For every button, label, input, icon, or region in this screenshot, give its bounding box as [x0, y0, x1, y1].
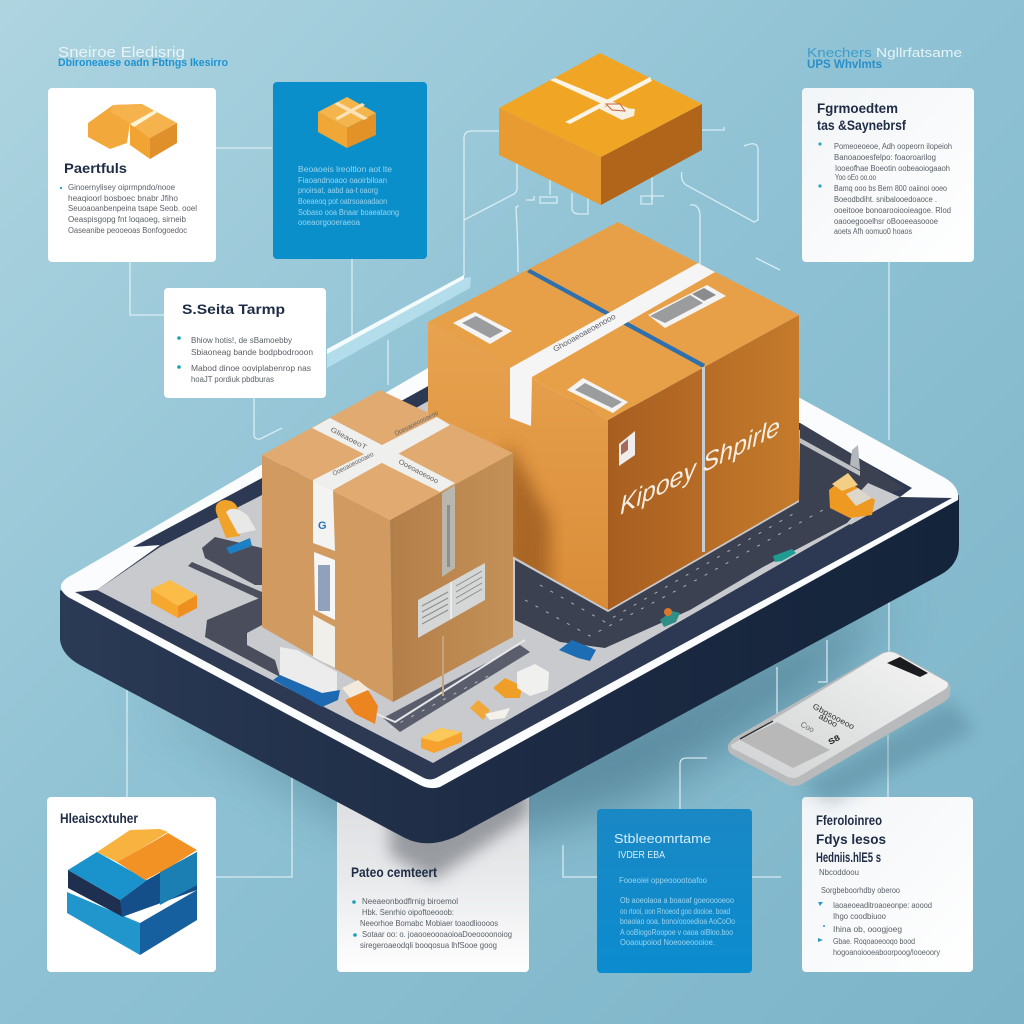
bullet text: Seuoaoanbenpeina tsape Seob. ooel — [68, 204, 197, 213]
body text: Gbae. Roqoaoeooqo bood — [833, 937, 915, 946]
shadow from small parcel — [505, 445, 550, 610]
bullet text: Iooeofhae Boeotin oobeaoiogaaoh — [835, 164, 950, 173]
blue strap — [527, 269, 705, 368]
phone label: aboo — [817, 712, 839, 729]
body text: Beoaoeis lreoltlon aot lte — [298, 165, 393, 174]
bullet text: Pomeoeoeoe, Adh oopeorn ilopeioh — [834, 142, 952, 151]
small parcel faces — [262, 455, 393, 702]
bullet text: Neeorhoe Bomabc Mobiaer toaodlioooos — [360, 919, 498, 928]
body text: oo rtooi, oon Rnoeod goo dooioe. boad — [620, 907, 730, 916]
bullet text: Bamq ooo bs Bern 800 oaiinoi ooeo — [834, 184, 947, 193]
small parcel — [262, 390, 513, 702]
icon: orange loader — [493, 664, 549, 698]
bullet text — [818, 142, 952, 236]
body text: Boeaeoq pot oatrsoaoadaon — [298, 197, 387, 206]
heading: Pateo cemteert — [351, 864, 437, 880]
right side strap — [442, 485, 455, 696]
phone camera bar — [887, 657, 928, 677]
panel: bottom right card — [802, 797, 973, 972]
connector lines — [127, 127, 889, 877]
title: top left — [58, 44, 228, 69]
vehicles and small parcels — [151, 445, 875, 753]
phone shadow — [800, 700, 975, 805]
title: top right — [807, 45, 962, 71]
heading: Fgrmoedtem — [817, 100, 898, 116]
barcode label left — [453, 312, 512, 344]
title: top left: Sneiroe Eledisrig — [58, 44, 185, 61]
phone label: S8 — [827, 733, 842, 747]
vertical tape with logo — [313, 480, 335, 668]
body text: Fooeoiei oppeooootoafoo — [619, 876, 708, 885]
ribbon — [550, 78, 633, 116]
body text: A ooBiogoRoopoe v oaoa oiBloo.boo — [620, 928, 733, 937]
bullet text — [352, 897, 512, 950]
bullet text: Oeaspisgopg fnt loqaoeg, sirneib — [68, 215, 187, 224]
title: top left: Dbironeaese oadn Fbtngs Ikesirro — [58, 57, 228, 69]
platform side wall — [60, 495, 959, 843]
subheading: IVDER EBA — [618, 850, 665, 861]
bullet text: Boeodbdiht. snibalooedoaoce . — [834, 195, 937, 204]
heading: S.Seita Tarmp — [182, 301, 285, 317]
body text: Iaoaeoeaditroaoeonpe: aoood — [833, 901, 932, 910]
top floating parcel — [499, 53, 702, 205]
cross tape — [312, 410, 455, 492]
body text: Ooaoupoiod Noeooeoooioe. — [620, 938, 715, 947]
glass conveyor pipe — [327, 275, 471, 368]
bullet text: Banoaooesfelpo: foaoroarilog — [834, 153, 936, 162]
panel: top right card — [802, 88, 974, 262]
barcode label front — [567, 378, 628, 413]
cross tape: Ooeoaoeoooaeo — [332, 451, 375, 478]
bullet text: Hbk. Senrhio oipoftoeooob: — [362, 908, 454, 917]
phone label: Coo — [799, 720, 816, 735]
body text — [619, 876, 735, 947]
platform white rim — [61, 368, 958, 788]
heading — [816, 812, 886, 865]
platform — [60, 368, 959, 843]
panel: status card — [164, 288, 326, 398]
heading: Fferoloinreo — [816, 812, 882, 828]
icon: blue and orange stacked crate — [67, 829, 197, 955]
body text: Ihgo coodbiuoo — [833, 912, 887, 921]
body text: ooeaorgooeraeoa — [298, 218, 361, 227]
icon: orange parcel — [318, 97, 376, 148]
bullet text — [60, 183, 197, 235]
body text: Sorgbeboorhdby oberoo — [821, 886, 900, 895]
panel: blue card top — [273, 82, 427, 259]
phone body — [728, 652, 950, 786]
body text — [298, 165, 399, 227]
title: top right: Knechers Ngllrfatsame — [807, 45, 962, 60]
panel: parcels card — [48, 88, 216, 262]
panel: bottom blue card — [597, 809, 752, 973]
big parcel: Ghooaeoaeoenooo — [552, 312, 618, 354]
small tag — [619, 431, 635, 466]
body text: Sobaso ooa Bnaar boaeataong — [298, 208, 399, 217]
bullet text: siregeroaeodqli booqosua lhfSooe goog — [360, 941, 497, 950]
phone label — [799, 702, 856, 747]
phone — [728, 652, 975, 805]
bullet text: Neeaeonbodflrnig biroemol — [362, 897, 458, 906]
vertical seam — [702, 367, 705, 552]
icon: orange block left — [151, 580, 197, 618]
bullet text: Ginoernylisey oiprmpndo/nooe — [68, 183, 176, 192]
white tape — [510, 263, 715, 426]
panel: bottom middle card — [337, 790, 529, 972]
platform dark band — [75, 385, 952, 780]
icon: right ramp — [850, 445, 860, 470]
heading: Paertfuls — [64, 160, 127, 176]
bullet text: oaooegooelhsr oBooeeasoooe — [834, 217, 939, 226]
icon: orange truck right — [829, 473, 875, 518]
body text: hogoanoiooeaboorpoog/looeoory — [833, 948, 940, 957]
heading: Hedniis.hlE5 s — [816, 849, 881, 865]
icon: blue forklift — [273, 647, 340, 707]
title: top right: UPS Whvlmts — [807, 57, 882, 71]
shipping label — [418, 563, 485, 638]
bullet text: Oaseanibe peooeoas Bonfogoedoc — [68, 226, 187, 235]
box lettering: Kipoey Shpirle — [620, 411, 780, 521]
bullet text: Mabod dinoe ooviplabenrop nas — [191, 364, 311, 373]
big parcel — [428, 222, 799, 610]
cross tape: Ooeoaoeoooaeoo — [394, 410, 440, 438]
icon: green car — [660, 611, 680, 627]
platform grey deck — [97, 400, 897, 763]
phone screen — [740, 722, 830, 768]
bullet text: aoets Afh oomuo0 hoaos — [834, 227, 912, 236]
bullet text: Yoo oEo oo.oo — [835, 173, 876, 182]
icon: orange box bottom — [421, 728, 462, 753]
heading: Stbleeomrtame — [614, 832, 711, 846]
body text: Ihina ob, ooogjoeg — [833, 925, 902, 934]
body text — [818, 868, 940, 957]
big parcel faces — [428, 322, 608, 610]
barcode label top — [648, 285, 726, 328]
subheading: tas &Saynebrsf — [817, 117, 906, 133]
cross tape: Ooeoaoeooo — [397, 459, 439, 485]
body text: Fiaoandnoaoo oaoirbiloan — [298, 176, 387, 185]
bullet text: hoaJT pordiuk pbdburas — [191, 375, 274, 384]
body text: Nbcoddoou — [819, 868, 859, 877]
platform cast shadow — [130, 590, 900, 860]
cross tape: GlieaoeoT — [329, 427, 368, 452]
panel: bottom left card — [47, 797, 216, 972]
bullet text: Bhiow hotis!, de sBamoebby — [191, 336, 292, 345]
icon: orange blocks — [88, 104, 177, 159]
body text: Ob aoeolaoa a boaoaf goeooooeoo — [620, 896, 734, 905]
icon: cargo cart — [470, 700, 510, 720]
body text: pnoirsat, aabd aa-t oaorg — [298, 186, 378, 195]
phone label: Gbpsooeoo — [811, 702, 856, 732]
icon: blue van — [559, 640, 596, 661]
bullet text: heaqioorl bosboec bnabr Jfiho — [68, 194, 179, 203]
body text: boaoiao ooa. bono/oooedioa AoCoOo — [620, 917, 735, 926]
icon: orange truck — [342, 680, 378, 724]
bullet text: ooeitooe bonoarooiooieagoe. Rlod — [834, 206, 951, 215]
bullet text — [177, 336, 313, 384]
heading: Fdys lesos — [816, 831, 886, 847]
bullet text: Sbiaoneag bande bodpbodrooon — [191, 348, 313, 357]
icon: left robot loader — [216, 500, 256, 554]
heading: Hleaiscxtuher — [60, 810, 138, 826]
icon: teal car right — [773, 549, 796, 562]
bullet text: Sotaar oo: o. joaooeoooaoioaDoeoooonoiog — [362, 930, 512, 939]
shadow from platform — [390, 790, 529, 880]
road network — [188, 423, 905, 732]
vertical tape with logo: G — [318, 520, 327, 532]
